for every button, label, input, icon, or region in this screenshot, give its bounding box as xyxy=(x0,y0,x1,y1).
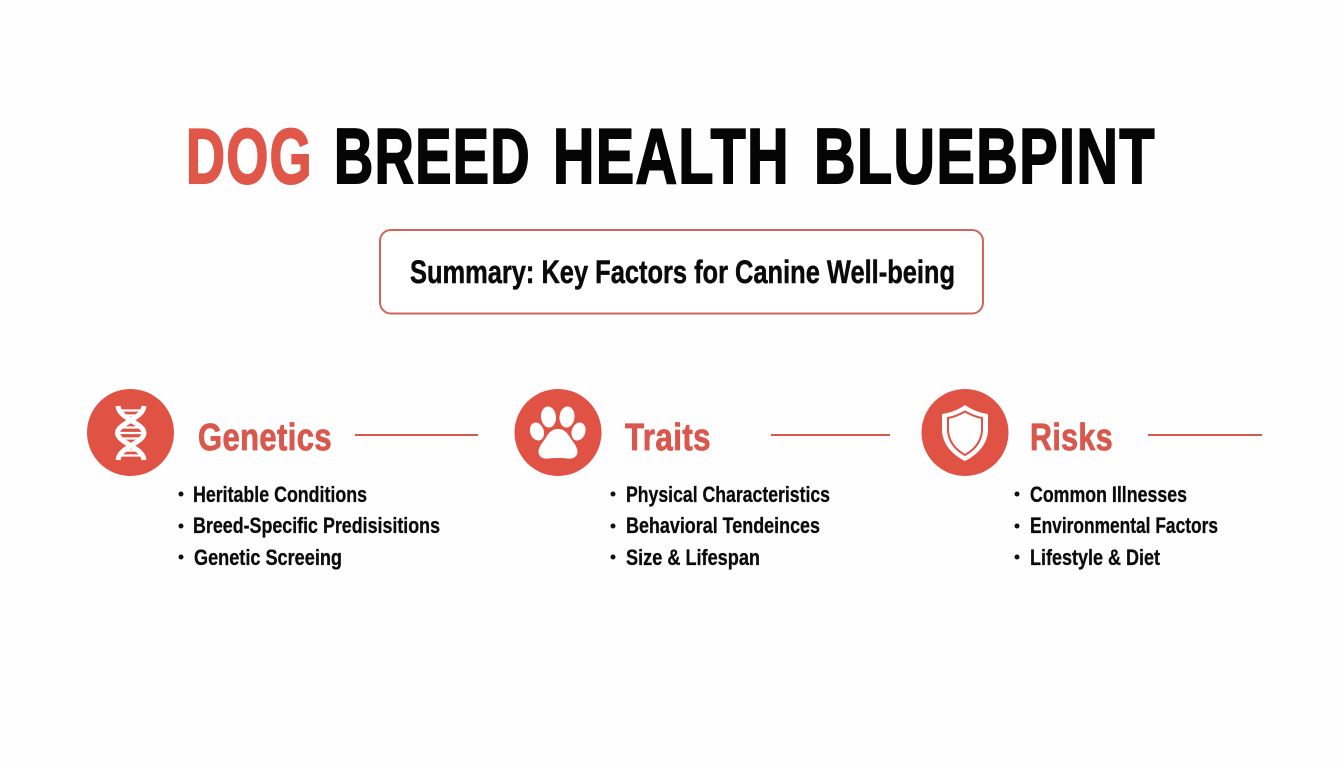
connector line: traits xyxy=(771,434,890,436)
connector line: genetics xyxy=(355,434,478,436)
connector line: risks xyxy=(1148,434,1262,436)
icon: DNA helix xyxy=(87,389,174,476)
icon: paw print xyxy=(514,389,602,476)
list: traits xyxy=(610,482,830,570)
list: risks: Environmental Factors xyxy=(1030,513,1218,538)
title xyxy=(186,112,1156,200)
summary box: Summary: Key Factors for Canine Well-being xyxy=(410,254,955,290)
list: traits: Behavioral Tendeinces xyxy=(626,513,820,538)
title: BLUEBPINT xyxy=(814,112,1156,200)
title: HEALTH xyxy=(553,112,790,200)
icon: shield xyxy=(922,389,1008,476)
panel: genetics xyxy=(87,389,478,570)
list: genetics xyxy=(178,482,440,570)
heading: traits: Traits xyxy=(625,417,711,459)
list: risks: Common Illnesses xyxy=(1030,482,1187,507)
title: BREED xyxy=(334,112,531,200)
list: genetics: Genetic Screeing xyxy=(194,545,342,570)
list: genetics: Breed-Specific Predisisitions xyxy=(193,513,440,538)
list: risks: Lifestyle & Diet xyxy=(1030,545,1161,570)
panel: traits xyxy=(514,389,890,570)
list: traits: Size & Lifespan xyxy=(626,545,760,570)
list: risks xyxy=(1014,482,1218,570)
heading: genetics: Genetics xyxy=(198,417,332,459)
panel: risks xyxy=(922,389,1262,570)
heading: risks: Risks xyxy=(1030,417,1113,459)
title: DOG xyxy=(186,112,313,200)
list: genetics: Heritable Conditions xyxy=(193,482,367,507)
summary box xyxy=(380,230,983,314)
list: traits: Physical Characteristics xyxy=(626,482,830,507)
